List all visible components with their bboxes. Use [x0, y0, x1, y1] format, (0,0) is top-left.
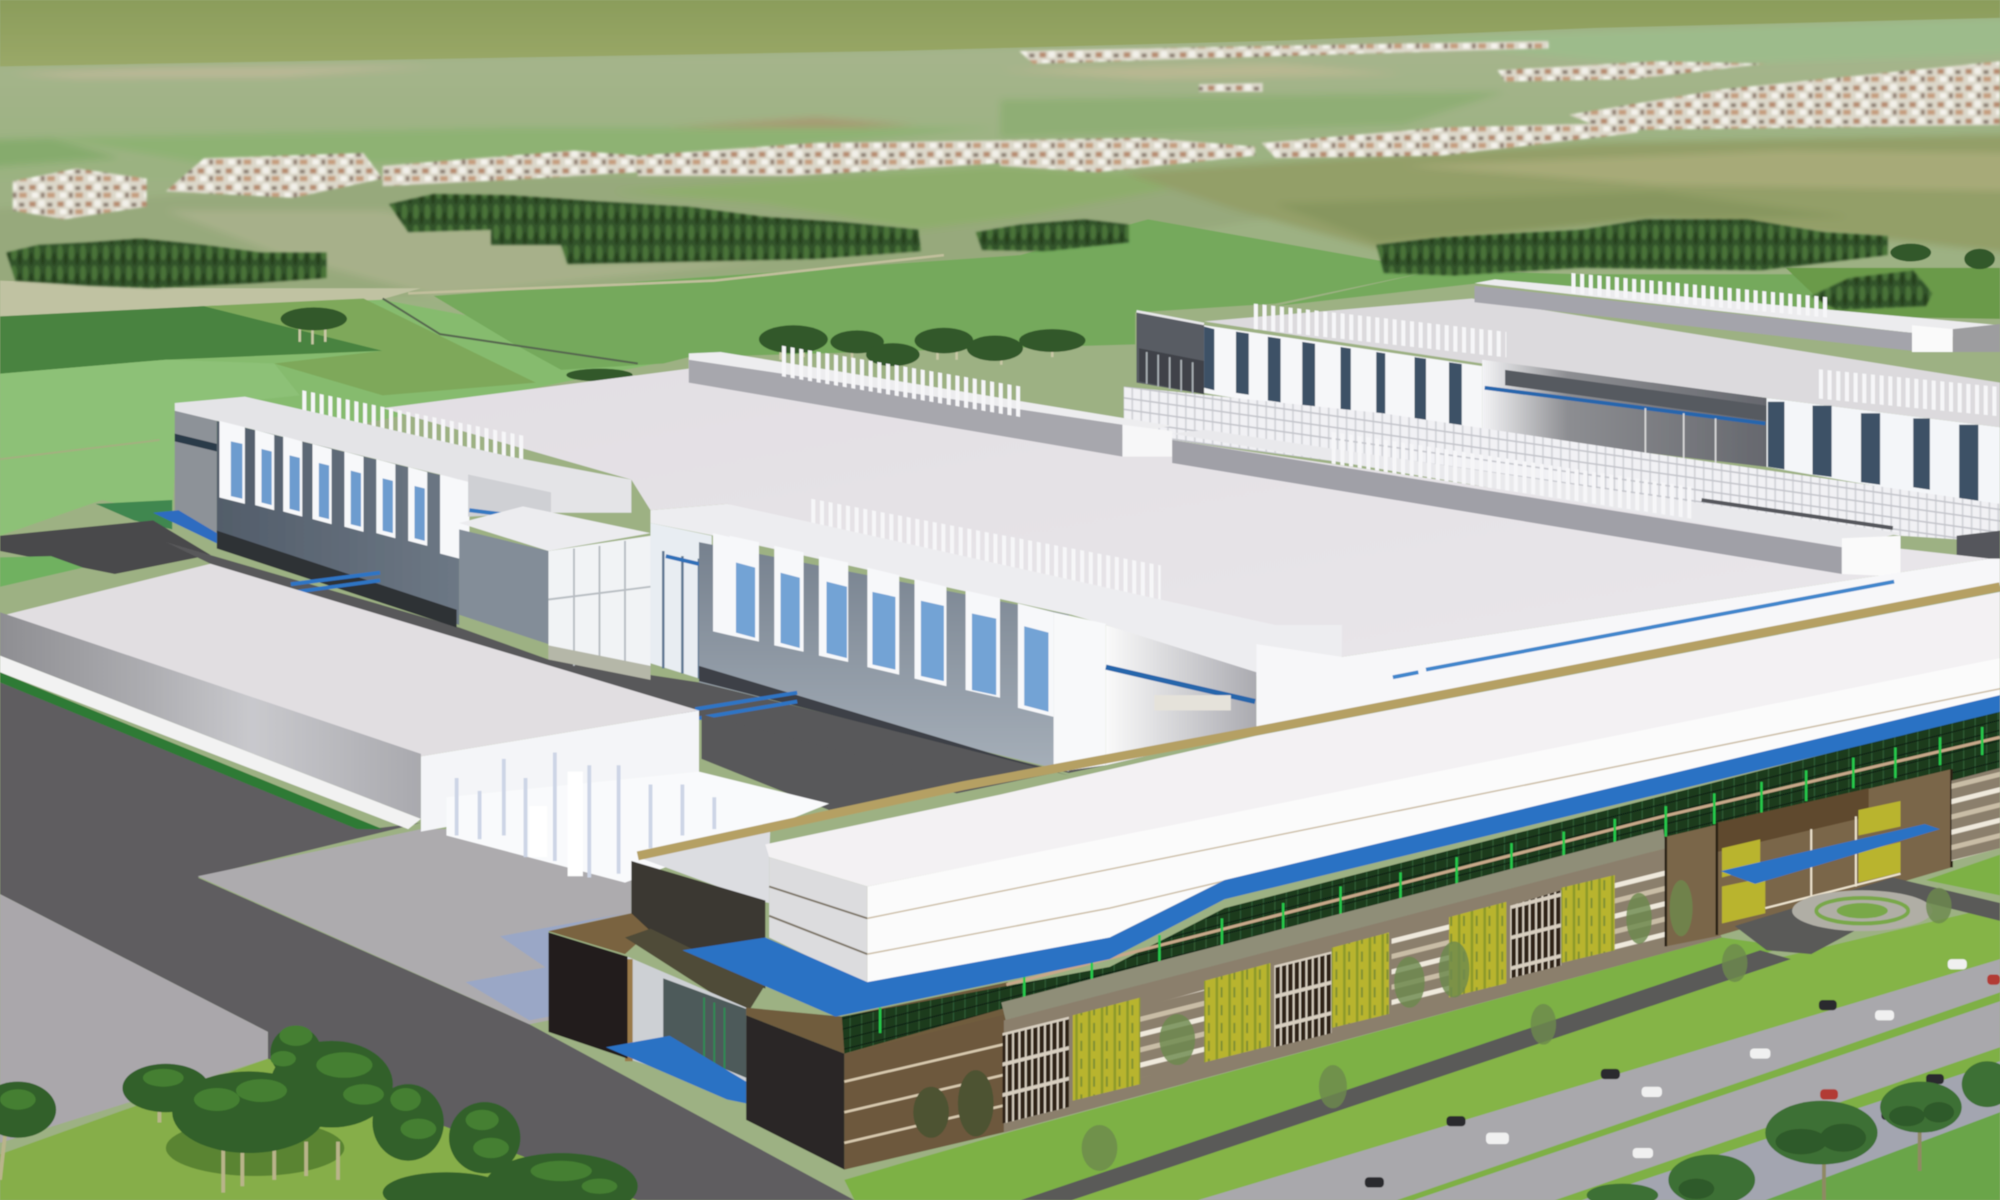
front building: brown terrace above corner [746, 982, 1008, 1054]
mid wing: roof band [651, 504, 1342, 676]
front building: brown corner face [844, 1014, 1008, 1170]
site: road lane one [1198, 959, 2000, 1200]
left wing: end wall [175, 408, 217, 536]
left wing: blue awning [153, 510, 217, 543]
left block: long side wall [0, 612, 421, 829]
site: second green median [1555, 1047, 2000, 1200]
ground: left light paved lot [0, 894, 268, 1143]
left wing: wall [217, 421, 459, 628]
site: dark access road [1020, 878, 2000, 1200]
mid wing: entrance glass [651, 523, 712, 682]
front building: long blue canopy [682, 695, 2000, 1017]
upper right building: raised service band [1474, 279, 2000, 352]
main fab: white front parapet with blue stripe [1256, 559, 2000, 733]
front building: dark left pillar [548, 932, 628, 1059]
vent stacks: seven rows of exhaust pipes [302, 283, 2000, 583]
front building: gold roof edge [638, 587, 2000, 856]
front building: planter ledge [1001, 829, 1666, 1023]
trees at bottom left [0, 1026, 638, 1200]
front building: dark corner face [746, 1015, 844, 1170]
cooling rack field [1124, 386, 2000, 561]
front building: brown terrace [548, 913, 765, 1015]
ground: shadows on plaza [466, 913, 625, 1020]
ground: asphalt yard [0, 682, 855, 1200]
upper right building: left end wall [1136, 311, 1204, 394]
left block: white end wall [421, 710, 699, 832]
site: road lane two [1413, 1001, 2000, 1200]
mid wing: blue windows [736, 562, 1048, 712]
ground: dark service court [702, 714, 963, 810]
blue pipe bridges [291, 573, 797, 718]
chemical tanks and silos [446, 753, 829, 883]
upper right building: recessed grey wall with blue stripe [1482, 360, 1767, 467]
upper right building: roof [1204, 298, 2000, 427]
facade: brown entrance tower with panels [1666, 769, 1952, 946]
site: bottom right lawn [1765, 1112, 2000, 1200]
tree clusters: woodland groves [6, 194, 1932, 310]
left wing: white column frames [219, 421, 469, 561]
villages in the distance [13, 41, 2000, 219]
site: green verge [1046, 906, 2000, 1200]
front building: lower facade backing [1004, 848, 1722, 1133]
facade: open floor panels [1140, 867, 1666, 1078]
left wing: roof band [175, 397, 631, 513]
site: road lane three [1582, 1061, 2000, 1200]
site: green median [1397, 992, 2000, 1200]
ground: paved plaza [198, 829, 631, 1024]
ground: front-left lawn [0, 1059, 638, 1200]
left wing: curved corner with blue stripe [468, 474, 551, 517]
left wing: blue windows [231, 441, 425, 541]
main fab: large white roof [383, 369, 1990, 657]
site: front lawn [844, 938, 1786, 1200]
mid wing: wall [699, 542, 1069, 776]
front building: dark upper block [631, 861, 765, 989]
front building: green glazed storey [842, 709, 2000, 1054]
main fab: rear raised service band [689, 352, 1172, 457]
facade: blue canopy on entrance tower [1721, 824, 1940, 884]
cars on the road [1365, 959, 2000, 1188]
front building: left low roof [638, 827, 770, 903]
upper right building: right column facade [1767, 398, 2000, 508]
front building: white upper volume [765, 592, 2000, 985]
front building: entrance glazing [625, 957, 746, 1097]
upper right building: column facade [1204, 325, 1482, 440]
mid wing: white column frames [713, 533, 1054, 717]
ground: service yard under buildings [166, 542, 1256, 793]
individual trees behind factory [281, 244, 1995, 381]
facade: right end floor panels [1952, 768, 2000, 861]
small street trees along facade [1082, 880, 1952, 1171]
front building: small blue entrance canopy [606, 1036, 746, 1103]
facade: dark lattice panels [1003, 890, 1561, 1124]
site: entrance roundabout plaza [1792, 890, 1932, 931]
facade: yellow green wall panels [1073, 875, 1615, 1101]
mid wing: end pillar [1054, 612, 1106, 770]
central link block [459, 506, 651, 680]
parking and shadow at left wing [0, 500, 210, 587]
left block: large flat roof [0, 564, 699, 756]
mid wing: grey end panel with blue stripe [1106, 625, 1256, 765]
main fab: right raised service band [1172, 430, 1901, 577]
site: lawn right of plaza [1926, 855, 2000, 895]
large trees at bottom right [1587, 1061, 2000, 1200]
